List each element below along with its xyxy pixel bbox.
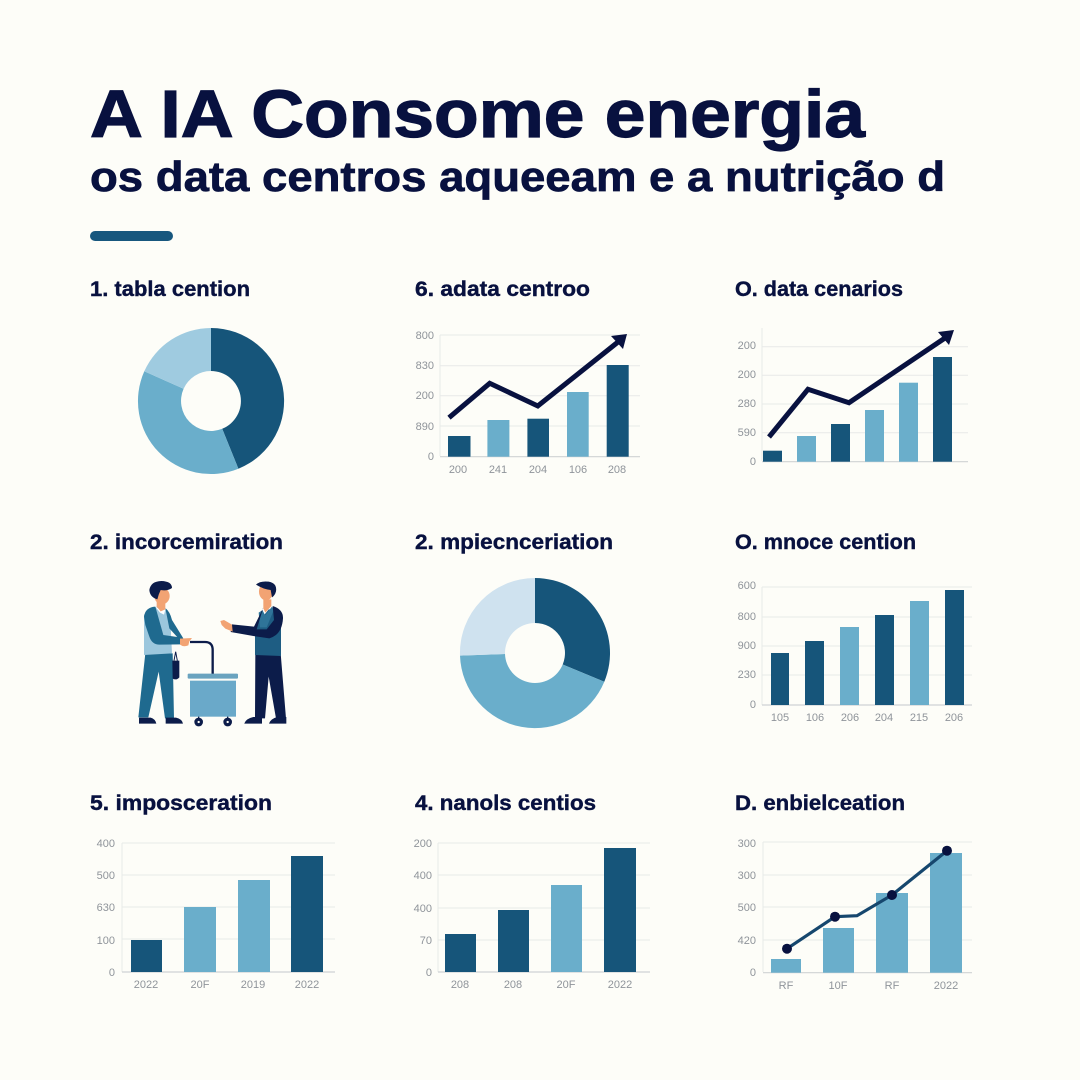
combo chart: 500: [738, 902, 756, 914]
bar chart: 0: [426, 967, 432, 979]
bar chart: 20F: [191, 979, 210, 991]
right person: [220, 581, 286, 724]
panel: 4 nanols centios: [414, 792, 650, 991]
bar chart with trend arrow: 890: [416, 421, 434, 433]
panel: 1 tabla cention: [90, 278, 284, 474]
panel: D enbielceation: [735, 792, 972, 992]
bar chart: 206: [945, 712, 963, 724]
combo chart: [738, 838, 972, 992]
bar chart: 0: [109, 967, 115, 979]
bar chart: [97, 838, 335, 991]
bar chart with trend arrow: 800: [416, 330, 434, 342]
bar chart: [738, 580, 972, 724]
left person: [138, 581, 192, 724]
bar chart with trend arrow: 280: [738, 398, 756, 410]
heading: O. mnoce cention: [735, 531, 916, 554]
bar chart: 630: [97, 902, 115, 914]
bar chart: 204: [875, 712, 893, 724]
trend line with markers: [782, 846, 952, 954]
bar chart: 500: [97, 870, 115, 882]
arrow: [449, 334, 627, 418]
combo chart: RF: [885, 980, 900, 992]
donut chart: [460, 578, 610, 728]
bar chart with trend arrow: [416, 330, 640, 476]
panel: 5 imposceration: [90, 792, 335, 991]
heading: 6. adata centroo: [415, 278, 590, 301]
panel: 2 mpiecnceriation: [415, 531, 613, 728]
bar chart: 215: [910, 712, 928, 724]
heading: 4. nanols centios: [415, 792, 596, 815]
combo chart: 300: [738, 870, 756, 882]
heading: 2. mpiecnceriation: [415, 531, 613, 554]
bar chart: 400: [414, 903, 432, 915]
panel: O data cenarios: [735, 278, 968, 468]
cart: [188, 642, 238, 726]
arrow: [769, 330, 954, 437]
heading: 5. imposceration: [90, 792, 272, 815]
bar chart: 206: [841, 712, 859, 724]
bar chart with trend arrow: 0: [750, 456, 756, 468]
illustration: two people with cart: [138, 581, 286, 726]
bar chart with trend arrow: 590: [738, 427, 756, 439]
bar chart with trend arrow: [738, 328, 968, 468]
bar chart: 2022: [134, 979, 158, 991]
bar chart: 0: [750, 699, 756, 711]
heading: O. data cenarios: [735, 278, 903, 301]
bar chart: 900: [738, 640, 756, 652]
bar chart: 2019: [241, 979, 265, 991]
title accent rule: [90, 231, 173, 241]
subtitle: os data centros aqueeam e a nutrição d: [90, 153, 945, 200]
bar chart: 208: [451, 979, 469, 991]
bar chart: [414, 838, 650, 991]
combo chart: RF: [779, 980, 794, 992]
combo chart: 300: [738, 838, 756, 850]
panel: 2 incorcemiration: [90, 531, 286, 726]
bar chart with trend arrow: 200: [416, 390, 434, 402]
bar chart: 230: [738, 669, 756, 681]
panel: 6 adata centroo: [415, 278, 640, 476]
bar chart: 400: [414, 870, 432, 882]
bar chart: 800: [738, 611, 756, 623]
bar chart: 106: [806, 712, 824, 724]
combo chart: 0: [750, 967, 756, 979]
bar chart: 400: [97, 838, 115, 850]
heading: 2. incorcemiration: [90, 531, 283, 554]
bar chart: 600: [738, 580, 756, 592]
bar chart: 2022: [608, 979, 632, 991]
bar chart with trend arrow: 200: [449, 464, 467, 476]
bar chart: 105: [771, 712, 789, 724]
bar chart with trend arrow: 0: [428, 451, 434, 463]
donut chart: [138, 328, 284, 474]
combo chart: 420: [738, 935, 756, 947]
heading: D. enbielceation: [735, 792, 905, 815]
heading: 1. tabla cention: [90, 278, 250, 301]
panel: O mnoce cention: [735, 531, 972, 724]
bar chart with trend arrow: 106: [569, 464, 587, 476]
bar chart: 100: [97, 935, 115, 947]
combo chart: 10F: [829, 980, 848, 992]
combo chart: 2022: [934, 980, 958, 992]
bar chart with trend arrow: 200: [738, 340, 756, 352]
bar chart with trend arrow: 208: [608, 464, 626, 476]
bar chart with trend arrow: 830: [416, 360, 434, 372]
bar chart: 2022: [295, 979, 319, 991]
title: A IA Consome energia: [90, 77, 866, 152]
bar chart: 200: [414, 838, 432, 850]
bar chart with trend arrow: 204: [529, 464, 547, 476]
bar chart with trend arrow: 200: [738, 369, 756, 381]
bar chart: 70: [420, 935, 432, 947]
bar chart: 208: [504, 979, 522, 991]
bar chart with trend arrow: 241: [489, 464, 507, 476]
bar chart: 20F: [557, 979, 576, 991]
